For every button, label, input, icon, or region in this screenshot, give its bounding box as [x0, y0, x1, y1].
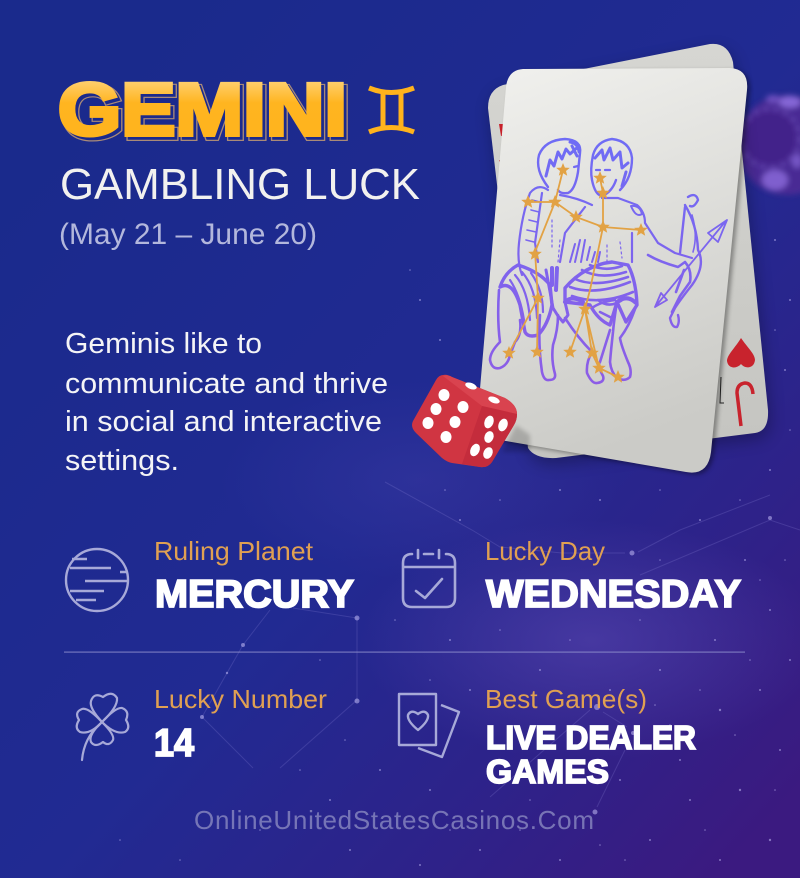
title: GEMINI: GEMINI [61, 71, 350, 154]
description: settings. [65, 445, 179, 477]
card pip: heart and letter J [720, 338, 755, 426]
divider [64, 652, 745, 653]
stat: best games: GAMES [486, 754, 609, 791]
torsos and arms [518, 187, 548, 275]
back card [488, 44, 770, 464]
stat: ruling planet [154, 536, 354, 616]
icon: four leaf clover [77, 694, 128, 760]
stat: lucky number: 14 [154, 722, 194, 765]
stat: lucky number: Lucky Number [154, 684, 327, 714]
description: communicate and thrive [65, 368, 388, 400]
front card [481, 70, 750, 475]
illustration: gemini twins [490, 139, 727, 383]
title: GEMINI: GEMINI [58, 68, 347, 151]
bow and arrow [670, 195, 701, 327]
description: Geminis like to [65, 328, 262, 360]
stat: ruling planet: Ruling Planet [154, 536, 314, 566]
icon: gemini symbol [369, 88, 414, 132]
stat: best games [485, 684, 696, 791]
stat: lucky number [154, 684, 327, 765]
stat: lucky day: Lucky Day [485, 536, 605, 566]
icon: red dice [412, 375, 530, 467]
stat: best games: Best Game(s) [485, 684, 647, 714]
subtitle: GAMBLING LUCK [60, 160, 420, 209]
stat: lucky day: WEDNESDAY [486, 573, 741, 616]
stat: best games: LIVE DEALER [486, 720, 696, 757]
playing cards [478, 44, 770, 475]
illustration: constellation [502, 163, 648, 383]
stat: ruling planet: MERCURY [155, 573, 354, 616]
icon: calendar [403, 550, 455, 607]
robes [500, 265, 552, 336]
icon: blurred casino chip [737, 95, 800, 195]
title: GEMINI: GEMINI [61, 71, 350, 154]
icon: planet [66, 549, 128, 611]
description: in social and interactive [65, 406, 382, 438]
date range: (May 21 – June 20) [59, 218, 317, 251]
description [65, 328, 388, 477]
watermark: OnlineUnitedStatesCasinos.Com [194, 805, 594, 835]
stat: lucky day [485, 536, 741, 616]
icon: playing cards [399, 694, 459, 757]
legs and feet [490, 290, 520, 368]
heads [538, 139, 580, 193]
